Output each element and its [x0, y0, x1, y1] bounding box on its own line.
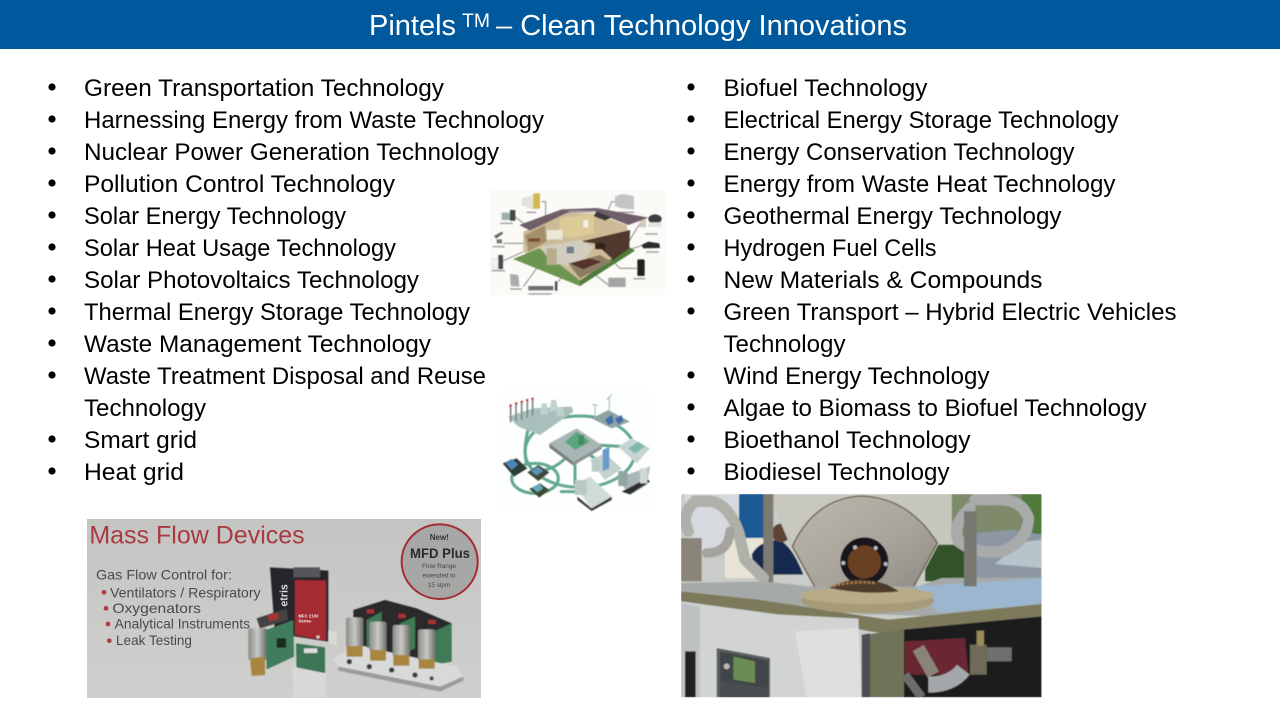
right technology list: Energy Conservation Technology — [724, 139, 1074, 166]
right technology list: New Materials & Compounds — [724, 267, 1042, 294]
MFC controller — [270, 567, 337, 645]
MFD Plus badge — [402, 524, 478, 599]
right technology list — [687, 75, 1176, 486]
right technology list: Technology — [724, 331, 846, 358]
right technology list: Energy from Waste Heat Technology — [724, 171, 1116, 198]
MFD Plus badge: extended to — [422, 573, 456, 580]
valve module — [248, 608, 326, 698]
title: Pintels — [369, 10, 456, 42]
manifold assembly — [333, 600, 463, 692]
right technology list: Geothermal Energy Technology — [724, 203, 1062, 230]
left technology list: Waste Management Technology — [84, 331, 431, 358]
left technology list: Thermal Energy Storage Technology — [84, 299, 470, 326]
right technology list: Biodiesel Technology — [724, 459, 950, 486]
left technology list: Green Transportation Technology — [84, 75, 444, 102]
left technology list: Waste Treatment Disposal and Reuse — [84, 363, 486, 390]
left technology list: Nuclear Power Generation Technology — [84, 139, 499, 166]
right technology list: Algae to Biomass to Biofuel Technology — [724, 395, 1146, 422]
left technology list: Pollution Control Technology — [84, 171, 395, 198]
left technology list: Solar Heat Usage Technology — [84, 235, 396, 262]
poster heading: Mass Flow Devices — [89, 521, 305, 549]
image: mass flow devices poster — [87, 519, 481, 698]
right technology list: Biofuel Technology — [724, 75, 928, 102]
poster bullet list: Oxygenators — [112, 600, 201, 616]
image: mass flow devices poster: Series — [298, 619, 312, 624]
right technology list: Hydrogen Fuel Cells — [724, 235, 936, 262]
image: biomass gasifier photo — [681, 494, 1042, 697]
right technology list: Electrical Energy Storage Technology — [724, 107, 1118, 134]
left technology list: Technology — [84, 395, 206, 422]
header banner — [0, 0, 1280, 49]
title: – Clean Technology Innovations — [496, 10, 907, 42]
poster bullet list — [96, 566, 261, 648]
poster bullet list: Analytical Instruments — [115, 616, 250, 632]
left technology list: Solar Energy Technology — [84, 203, 346, 230]
poster bullet list: Gas Flow Control for: — [96, 566, 232, 582]
poster bullet list: Ventilators / Respiratory — [110, 584, 261, 600]
right technology list: Wind Energy Technology — [724, 363, 990, 390]
MFD Plus badge: MFD Plus — [410, 545, 470, 561]
image: smart home cutaway — [490, 190, 665, 295]
right technology list: Green Transport – Hybrid Electric Vehicles — [724, 299, 1176, 326]
left technology list: Solar Photovoltaics Technology — [84, 267, 419, 294]
MFD Plus badge: Flow Range — [422, 563, 456, 570]
image: mass flow devices poster: etris — [278, 584, 290, 607]
image: mass flow devices poster: MFC 2100 — [298, 613, 319, 618]
right technology list: Bioethanol Technology — [724, 427, 970, 454]
left technology list: Harnessing Energy from Waste Technology — [84, 107, 544, 134]
left technology list — [48, 75, 544, 486]
left technology list: Smart grid — [84, 427, 197, 454]
image: smart grid network — [500, 390, 653, 511]
MFD Plus badge: New! — [430, 533, 449, 542]
left technology list: Heat grid — [84, 459, 184, 486]
poster bullet list: Leak Testing — [116, 632, 192, 648]
title: TM — [462, 11, 490, 32]
MFD Plus badge: 15 slpm — [428, 582, 450, 589]
